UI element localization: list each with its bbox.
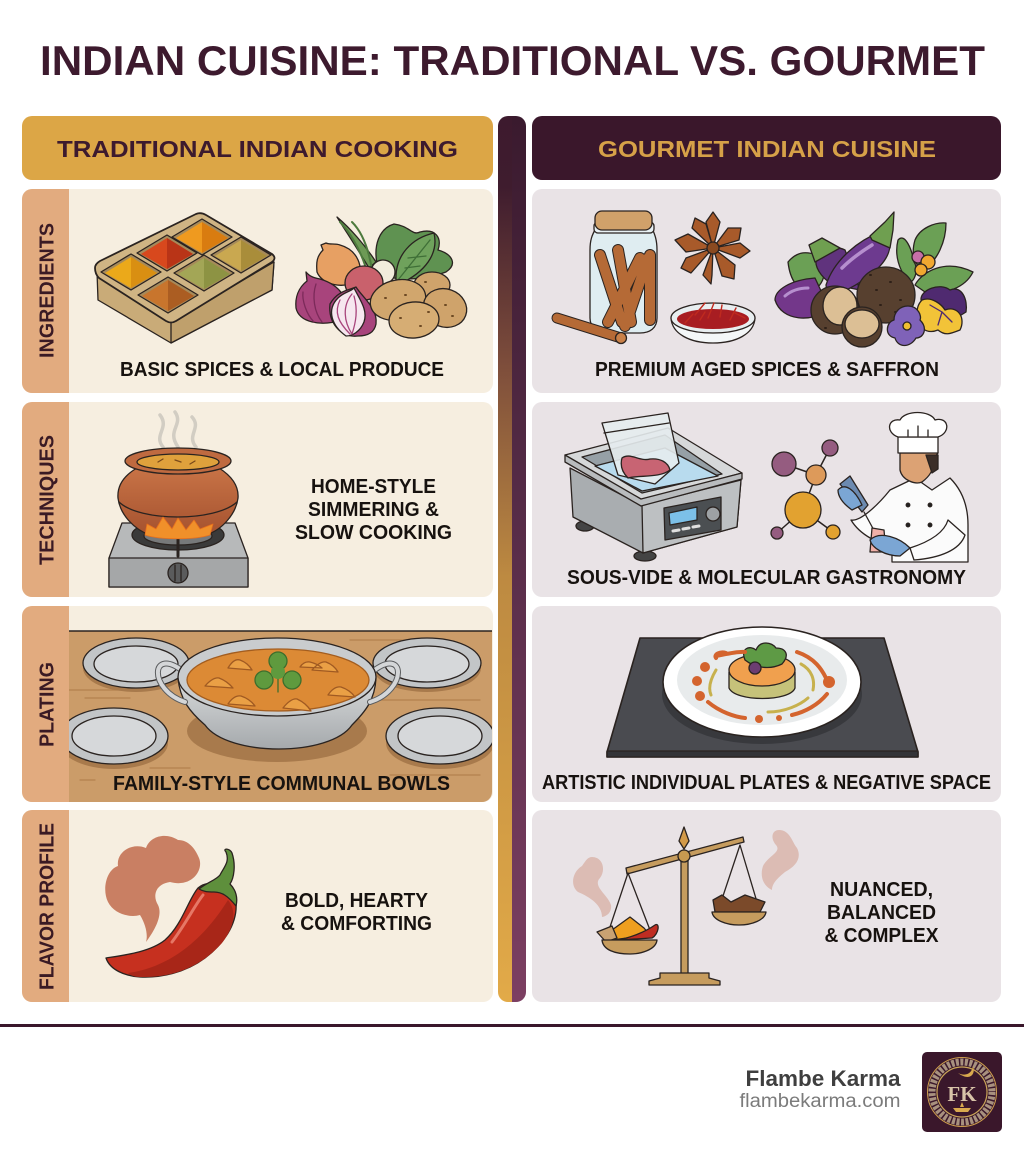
label text: & COMPLEX [824, 924, 939, 947]
center divider bar [498, 116, 526, 1002]
label text: HOME-STYLE [311, 475, 436, 498]
icon: sous-vide water bath [565, 413, 742, 561]
label text: BALANCED [827, 901, 936, 924]
panel: gourmet ingredients [532, 189, 1001, 393]
column header: gourmet [532, 116, 1001, 180]
row label: plating: PLATING [36, 662, 58, 747]
panel: traditional ingredients [22, 189, 493, 393]
wooden table [69, 631, 492, 802]
label text: PREMIUM AGED SPICES & SAFFRON [595, 358, 939, 381]
column header: gourmet: GOURMET INDIAN CUISINE [598, 136, 936, 162]
icon: saffron bowl [671, 303, 755, 343]
label text: BOLD, HEARTY [285, 889, 428, 912]
icon: balance scale with spices [597, 827, 766, 985]
row label: techniques: TECHNIQUES [36, 435, 58, 565]
icon: star anise [675, 212, 750, 284]
icon: molecule [771, 440, 840, 539]
column header: traditional: TRADITIONAL INDIAN COOKING [57, 136, 458, 162]
title: INDIAN CUISINE: TRADITIONAL VS. GOURMET [40, 37, 985, 84]
label text [824, 878, 939, 947]
footer brand text: flambekarma.com [740, 1091, 900, 1112]
column header: traditional [22, 116, 493, 180]
label text: FAMILY-STYLE COMMUNAL BOWLS [113, 772, 450, 795]
icon: masala spice box [95, 213, 274, 343]
icon: chef with pipette [838, 412, 968, 562]
icon: spice cloud [105, 836, 200, 942]
icon: onions and potatoes [296, 217, 472, 340]
logo [922, 1052, 1002, 1132]
icon: clay pot on gas stove [109, 412, 248, 587]
icon: slate board and artistic plate [607, 627, 918, 757]
panel: gourmet plating [532, 606, 1001, 802]
label text: SLOW COOKING [295, 521, 452, 544]
panel: traditional techniques [22, 402, 493, 597]
label text [281, 889, 432, 935]
label text [295, 475, 452, 544]
label text: SOUS-VIDE & MOLECULAR GASTRONOMY [567, 566, 966, 589]
panel: gourmet techniques [532, 402, 1001, 597]
label text: BASIC SPICES & LOCAL PRODUCE [120, 358, 444, 381]
panel: traditional flavor profile [22, 810, 493, 1002]
footer divider [0, 1024, 1024, 1027]
icon: cinnamon jar [557, 211, 657, 344]
panel: traditional plating [22, 606, 494, 802]
row label: flavor profile: FLAVOR PROFILE [36, 823, 58, 990]
label text: SIMMERING & [308, 498, 439, 521]
icon: eggplant truffle and edible flowers [775, 212, 973, 347]
label text: & COMFORTING [281, 912, 432, 935]
icon: red chili [106, 849, 237, 977]
row label: ingredients: INGREDIENTS [36, 223, 58, 358]
illustration: communal bowl and plates [60, 638, 494, 780]
icon: aroma wisps [573, 830, 799, 917]
logo: FK [947, 1082, 977, 1106]
panel: gourmet flavor profile [532, 810, 1001, 1002]
footer brand text [740, 1066, 901, 1112]
label text: NUANCED, [830, 878, 933, 901]
footer brand text: Flambe Karma [746, 1066, 901, 1091]
